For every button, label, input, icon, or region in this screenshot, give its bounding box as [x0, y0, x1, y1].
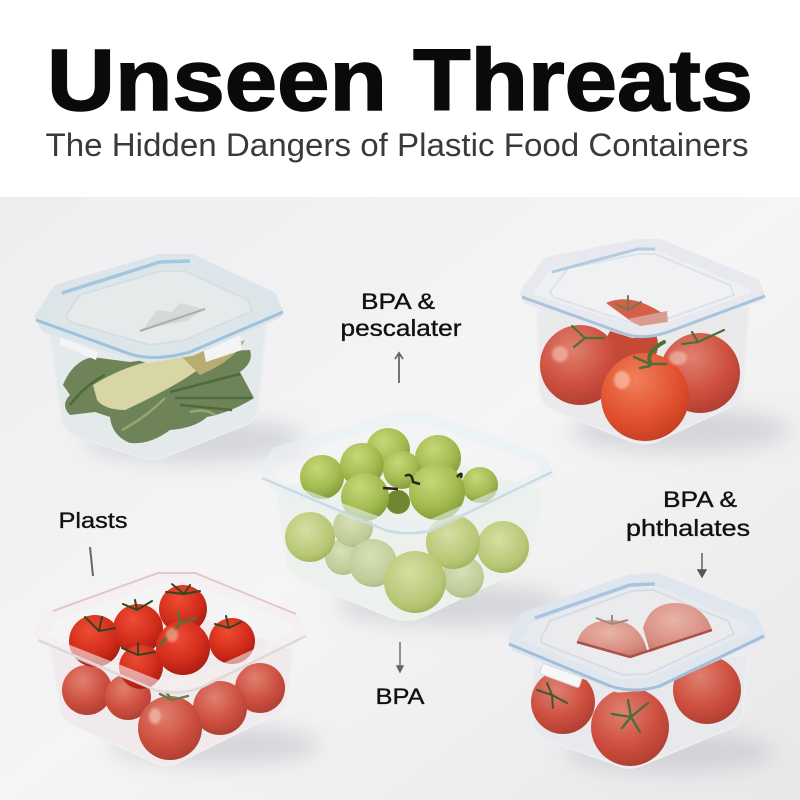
label: BPA & phthalates: phthalates — [626, 515, 750, 541]
arrow: up to label — [395, 353, 403, 383]
label: Plasts: Plasts — [58, 508, 128, 533]
container: cherry tomatoes, bottom left — [38, 573, 320, 765]
arrow: down to bottom right container — [698, 553, 706, 577]
label: BPA & phthalates: BPA & — [663, 487, 737, 512]
label: BPA & pescalater: pescalater — [340, 315, 462, 341]
vegetables — [63, 340, 254, 443]
pointer line: Plasts — [90, 547, 93, 576]
cherry tomatoes — [62, 584, 285, 760]
lid — [522, 245, 765, 337]
container: tomatoes with blue lid, bottom right — [509, 579, 775, 772]
tomatoes — [531, 656, 741, 766]
tomato seen through lid — [606, 299, 662, 319]
lid — [509, 579, 764, 690]
label: BPA: BPA — [376, 684, 425, 709]
photo background — [0, 197, 800, 800]
label: BPA & phthalates — [626, 487, 750, 541]
tomatoes seen through lid — [643, 603, 712, 652]
label: BPA & pescalater — [340, 289, 462, 341]
rim — [262, 418, 552, 533]
header background — [0, 0, 800, 197]
lid clips — [60, 334, 242, 362]
title: Unseen Threats — [47, 32, 753, 129]
container: green grapes, center — [262, 418, 565, 625]
grapes — [285, 428, 529, 613]
lid clip — [539, 663, 582, 688]
lid — [36, 261, 283, 358]
rim — [38, 573, 306, 693]
tomatoes — [540, 319, 740, 441]
arrow: down to BPA label — [397, 642, 403, 672]
container: vegetables, top left — [36, 261, 305, 462]
subtitle: The Hidden Dangers of Plastic Food Containers — [46, 127, 748, 163]
container: tomatoes, top right — [522, 245, 790, 452]
label: BPA & pescalater: BPA & — [361, 289, 435, 314]
